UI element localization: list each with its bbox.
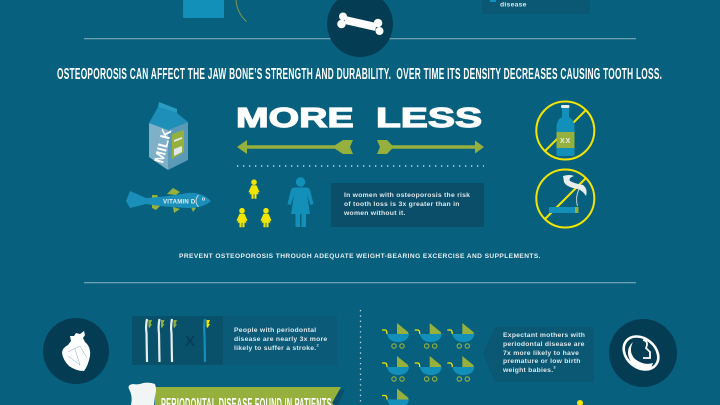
dotted vertical divider (360, 310, 362, 405)
arrow: less (377, 140, 484, 154)
heading: less: LESS (376, 102, 482, 133)
text: expectant mothers statistic: weight babies.3 (503, 365, 556, 374)
callout fragment: disease (482, 0, 590, 14)
divider lower (84, 282, 636, 283)
text: expectant mothers statistic: 7x more likely to have (503, 350, 579, 357)
text: expectant mothers statistic: periodontal disease are (503, 341, 585, 348)
text: stroke statistic: disease are nearly 3x more (234, 336, 327, 343)
icon: heart badge (43, 318, 109, 384)
icon: no alcohol (536, 102, 594, 160)
text: expectant mothers statistic: premature or low birth (503, 358, 581, 365)
panel: stroke statistic (132, 316, 337, 365)
arrow: more (237, 140, 353, 154)
text: stroke statistic: People with periodontal (234, 327, 316, 334)
text: risk of tooth loss (344, 192, 470, 217)
text: risk of tooth loss: In women with osteoporosis the risk (344, 192, 470, 199)
heading: jaw bone statement: OSTEOPOROSIS CAN AFFECT THE JAW BONE’S STRENGTH AND DURABILITY. OVER TIME ITS DENSITY DECREASES CAUSING TOOTH LOSS. (57, 66, 662, 83)
text: stroke statistic: likely to suffer a stroke.2 (234, 342, 319, 352)
panel: risk of tooth loss (331, 183, 484, 227)
icon: fetus badge (609, 319, 677, 387)
text: risk of tooth loss: women without it. (344, 210, 406, 217)
icon: fish with vitamin D label: VITAMIN D (163, 200, 196, 206)
text: risk of tooth loss: of tooth loss is 3x greater than in (344, 201, 460, 208)
icon: strollers (382, 323, 474, 405)
icon: yellow women (236, 179, 272, 227)
ribbon: periodontal disease (128, 383, 345, 405)
green curve fragment (236, 0, 246, 22)
text: stroke statistic (234, 327, 327, 352)
yellow dot (577, 400, 583, 405)
icon: toothbrushes: X (185, 333, 195, 350)
heading: more: MORE (236, 102, 354, 133)
icon: fish with vitamin D label (126, 188, 211, 213)
divider top (84, 38, 636, 39)
icon: no smoking (536, 170, 594, 228)
text: prevent osteoporosis: PREVENT OSTEOPOROSIS THROUGH ADEQUATE WEIGHT-BEARING EXCERCISE AND SUPPLEMENTS. (179, 253, 541, 260)
dotted divider (237, 165, 484, 167)
icon: bone badge (327, 0, 393, 57)
icon: toothbrushes (146, 319, 210, 362)
callout fragment: disease: disease (500, 2, 527, 8)
panel: expectant mothers arrow callout (483, 327, 594, 382)
text: expectant mothers statistic: Expectant mothers with (503, 332, 585, 339)
icon: large blue woman (288, 177, 314, 227)
icon: milk carton (149, 102, 188, 170)
icon: blue box fragment (183, 0, 224, 18)
icon: milk carton: MILK (151, 127, 174, 165)
icon: no alcohol: XX (560, 138, 571, 145)
icon: tooth (128, 383, 156, 405)
text: expectant mothers statistic (503, 332, 585, 374)
